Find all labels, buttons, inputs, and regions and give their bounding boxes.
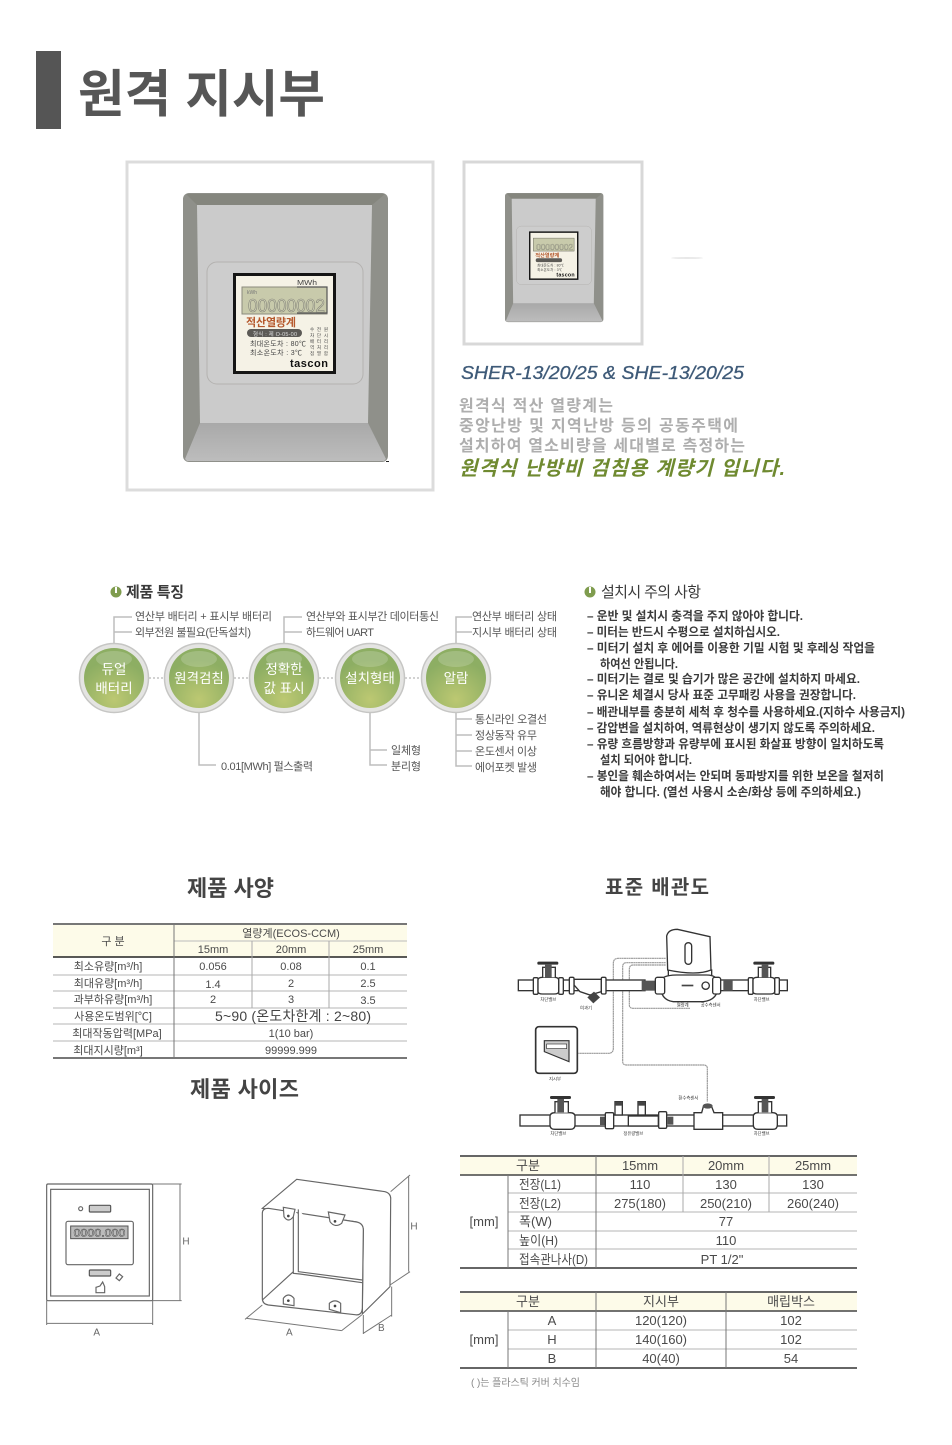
panel: large meter photo (127, 162, 433, 490)
table: product specification: 20mm (276, 944, 306, 956)
table: product specification: 2.5 (360, 978, 376, 990)
product description text (459, 363, 785, 480)
table: product specification: 2 (210, 994, 216, 1006)
feature circle: 정확한 값 표시: 값 표시 (263, 681, 305, 696)
diagram: product size drawings (47, 1175, 418, 1338)
installation notes list: – 배관내부를 충분히 세척 후 청수를 사용하세요.(지하수 사용금지) (587, 704, 905, 719)
title: 원격 지시부 (36, 51, 325, 129)
table: pipe dimensions: 높이(H) (519, 1233, 558, 1248)
table: pipe dimensions: 15mm (622, 1158, 658, 1173)
feature labels: 연산부 배터리 상태 (472, 610, 557, 623)
table: indicator and box dimensions: 102 (780, 1313, 802, 1328)
table: indicator and box dimensions: 54 (784, 1351, 798, 1366)
feature circle: 원격검침 (164, 644, 234, 712)
small meter housing: 최대온도차 : 80℃ (537, 262, 565, 267)
panel: small meter photo (464, 162, 703, 344)
table: pipe dimensions: 275(180) (614, 1196, 666, 1211)
table: pipe dimensions: [mm] (470, 1214, 498, 1229)
diagram labels: 차단밸브 (550, 1130, 566, 1137)
product description text: 중앙난방 및 지역난방 등의 공동주택에 (459, 417, 738, 435)
table: indicator and box dimensions: [mm] (470, 1332, 498, 1347)
meter housing: 최소온도차 : 3℃ (250, 348, 302, 357)
feature circle: 듀얼 배터리 (80, 644, 148, 712)
table: pipe dimensions: 77 (719, 1214, 733, 1229)
small meter housing (505, 193, 603, 322)
feature labels (135, 610, 557, 774)
meter body (655, 929, 721, 1002)
table: product specification: 2 (288, 978, 294, 990)
front view dimensions (47, 1184, 190, 1338)
heading: 표준 배관도: 표준 배관도 (605, 876, 709, 899)
meter housing: 00000002 (248, 296, 325, 316)
heading: 설치시 주의 사항: 설치시 주의 사항 (601, 584, 701, 601)
feature labels: 0.01[MWh] 펄스출력 (221, 760, 313, 773)
meter housing (183, 193, 388, 462)
table: product specification: 3 (288, 994, 294, 1006)
table: indicator and box dimensions: 구분 (516, 1294, 540, 1309)
table: product specification: 1.4 (205, 979, 221, 991)
installation notes list: – 감압변을 설치하여, 역류현상이 생기지 않도록 주의하세요. (587, 720, 875, 735)
table: pipe dimensions (460, 1156, 857, 1268)
table: product specification: 0.08 (280, 961, 302, 973)
table: indicator and box dimensions: H (547, 1332, 557, 1347)
front view (47, 1184, 153, 1301)
table: pipe dimensions: 110 (716, 1233, 736, 1248)
meter housing: 배터리 (310, 338, 328, 345)
feature labels: 분리형 (391, 760, 421, 773)
small meter housing: 00000002 (536, 242, 573, 252)
meter housing: 적산열량계 (246, 315, 296, 329)
table: pipe dimensions: 20mm (708, 1158, 744, 1173)
feature circle: 설치형태: 설치형태 (345, 671, 395, 686)
back box view (262, 1179, 391, 1315)
installation notes list: – 미터기는 결로 및 습기가 많은 공간에 설치하지 마세요. (587, 671, 860, 686)
installation notes list: 하여선 안됩니다. (600, 656, 678, 671)
feature circle: 정확한 값 표시 (250, 644, 318, 712)
table: pipe dimensions: 전장(L1) (519, 1177, 561, 1192)
table: product specification: 0.1 (360, 961, 376, 973)
feature labels: 에어포켓 발생 (475, 761, 537, 774)
table: pipe dimensions: 구분 (516, 1158, 540, 1173)
table: product specification: 열량계(ECOS-CCM) (242, 927, 340, 940)
diagram labels: 차단밸브 (540, 996, 556, 1003)
table: product specification: 과부하유량[m³/h] (74, 992, 152, 1006)
feature circle: 듀얼 배터리: 배터리 (95, 681, 133, 696)
table: pipe dimensions: 250(210) (700, 1196, 752, 1211)
meter housing: 형식 : 제 O-05-00 (253, 330, 297, 338)
product description text: 원격식 적산 열량계는 (459, 397, 613, 415)
diagram labels: 열량계 (677, 1002, 689, 1009)
installation notes list (587, 608, 905, 799)
table: product specification: 99999.999 (265, 1045, 317, 1057)
lower pipe run (520, 1096, 787, 1129)
installation notes list: – 미터는 반드시 수평으로 설치하십시오. (587, 625, 780, 639)
feature labels: 정상동작 유무 (475, 729, 537, 742)
table: product specification: 5~90 (온도차한계 : 2~80) (215, 1008, 371, 1024)
heading: 제품 사양: 제품 사양 (187, 876, 274, 901)
table: product specification (53, 924, 407, 1058)
meter housing: kWh (247, 290, 257, 296)
table: pipe dimensions: 110 (630, 1177, 650, 1192)
diagram labels: 여과기 (580, 1004, 592, 1011)
table: product specification: 사용온도범위[℃] (74, 1010, 152, 1023)
upper pipe run (518, 962, 787, 1003)
heading: 제품 사이즈: 제품 사이즈 (190, 1077, 299, 1102)
feature circle: 알람: 알람 (444, 671, 468, 686)
table: indicator and box dimensions (460, 1292, 857, 1368)
table: pipe dimensions: 130 (802, 1177, 824, 1192)
feature circle: 설치형태 (336, 644, 404, 712)
table: product specification: 1(10 bar) (269, 1028, 313, 1040)
feature labels: 통신라인 오결선 (475, 713, 547, 726)
small meter housing: tascon (556, 273, 575, 279)
diagram labels: 환수측센서 (678, 1094, 698, 1101)
diagram labels: 차단밸브 (754, 996, 770, 1003)
feature labels: 온도센서 이상 (475, 745, 537, 758)
small meter housing: 적산열량계 (535, 251, 559, 259)
feature circle: 원격검침: 원격검침 (174, 671, 224, 686)
installation notes list: – 유량 흐름방향과 유량부에 표시된 화살표 방향이 일치하도록 (587, 736, 884, 751)
meter housing: 역처리 (310, 344, 328, 351)
feature circle: 정확한 값 표시: 정확한 (265, 662, 303, 677)
table: indicator and box dimensions: 102 (780, 1332, 802, 1347)
product description text: SHER-13/20/25 & SHE-13/20/25 (461, 363, 745, 383)
table: pipe dimensions: 130 (715, 1177, 737, 1192)
title: 원격 지시부: 원격 지시부 (78, 66, 325, 123)
feature circle: 듀얼 배터리: 듀얼 (102, 662, 126, 677)
product description text: 원격식 난방비 검침용 계량기 입니다. (459, 458, 785, 480)
remote indicator (536, 1027, 577, 1073)
installation notes list: – 봉인을 훼손하여서는 안되며 동파방지를 위한 보온을 철저히 (587, 768, 884, 783)
feature labels: 하드웨어 UART (306, 625, 374, 639)
front view: 0000.000 (74, 1228, 125, 1240)
feature labels: 일체형 (391, 743, 421, 757)
meter housing: 차단시 (310, 332, 328, 339)
table: product specification: 최대유량[m³/h] (74, 977, 142, 990)
heading: 제품 특징: 제품 특징 (126, 584, 184, 601)
meter housing: tascon (290, 358, 328, 370)
meter housing: 점멸함 (310, 350, 328, 356)
table: pipe dimensions: 접속관나사(D) (519, 1252, 588, 1267)
diagram labels: 공수측센서 (701, 1002, 721, 1009)
box view dimensions (245, 1175, 418, 1338)
diagram labels: 정유량밸브 (623, 1130, 643, 1137)
table: indicator and box dimensions: A (548, 1313, 557, 1328)
table: product specification: 구 분 (101, 936, 125, 948)
box view dimensions: B (378, 1323, 385, 1334)
small meter housing: 최소온도차 : 3℃ (537, 267, 563, 272)
table: pipe dimensions: 전장(L2) (519, 1196, 561, 1211)
table: product specification: 최대작동압력[MPa] (72, 1027, 162, 1040)
diagram labels: 지시부 (549, 1075, 561, 1082)
table: indicator and box dimensions: 지시부 (643, 1294, 679, 1309)
table: pipe dimensions: PT 1/2" (701, 1252, 744, 1267)
table: indicator and box dimensions: 140(160) (635, 1332, 687, 1347)
table: pipe dimensions: 폭(W) (519, 1214, 552, 1229)
table: indicator and box dimensions: 매립박스 (767, 1294, 815, 1309)
feature labels: 외부전원 불필요(단독설치) (135, 626, 251, 639)
table: product specification: 15mm (198, 944, 228, 956)
box view dimensions: H (410, 1221, 418, 1232)
diagram: standard piping (518, 929, 787, 1137)
feature connector lines (114, 617, 472, 766)
installation notes list: – 운반 및 설치시 충격을 주지 않아야 합니다. (587, 608, 803, 623)
table: product specification: 25mm (353, 944, 383, 956)
table: indicator and box dimensions: B (548, 1351, 556, 1366)
installation notes list: – 미터기 설치 후 에어를 이용한 기밀 시험 및 후레싱 작업을 (587, 640, 875, 655)
table: indicator and box dimensions: 120(120) (635, 1313, 687, 1328)
product description text: 설치하여 열소비량을 세대별로 측정하는 (459, 437, 745, 455)
diagram labels (540, 996, 770, 1137)
installation notes list: 설치 되어야 합니다. (600, 752, 692, 767)
table: product specification: 최대지시량[m³] (73, 1044, 143, 1057)
front view dimensions: A (93, 1327, 100, 1338)
table: product specification: 0.056 (199, 961, 227, 973)
diagram labels: 차단밸브 (754, 1130, 770, 1137)
feature labels: 연산부와 표시부간 데이터통신 (306, 610, 439, 623)
feature labels: 연산부 배터리 + 표시부 배터리 (135, 610, 272, 623)
meter housing: MWh (297, 278, 317, 287)
installation notes list: – 유니온 체결시 당사 표준 고무패킹 사용을 권장합니다. (587, 687, 856, 702)
table: indicator and box dimensions: 40(40) (642, 1351, 680, 1366)
table: product specification: 3.5 (360, 995, 376, 1007)
installation notes list: 해야 합니다. (열선 사용시 소손/화상 등에 주의하세요.) (600, 784, 861, 799)
feature circle: 알람 (422, 644, 490, 712)
box view dimensions: A (286, 1327, 293, 1338)
front view dimensions: H (182, 1237, 190, 1248)
sensor wires (578, 958, 707, 1102)
meter housing: 최대온도차 : 80℃ (250, 339, 306, 348)
feature labels: 지시부 배터리 상태 (472, 626, 557, 639)
footnote: ( )는 플라스틱 커버 치수임 (471, 1376, 580, 1389)
table: pipe dimensions: 260(240) (787, 1196, 839, 1211)
table: pipe dimensions: 25mm (795, 1158, 831, 1173)
meter housing: 수전원 (310, 326, 328, 333)
table: product specification: 최소유량[m³/h] (74, 960, 142, 973)
